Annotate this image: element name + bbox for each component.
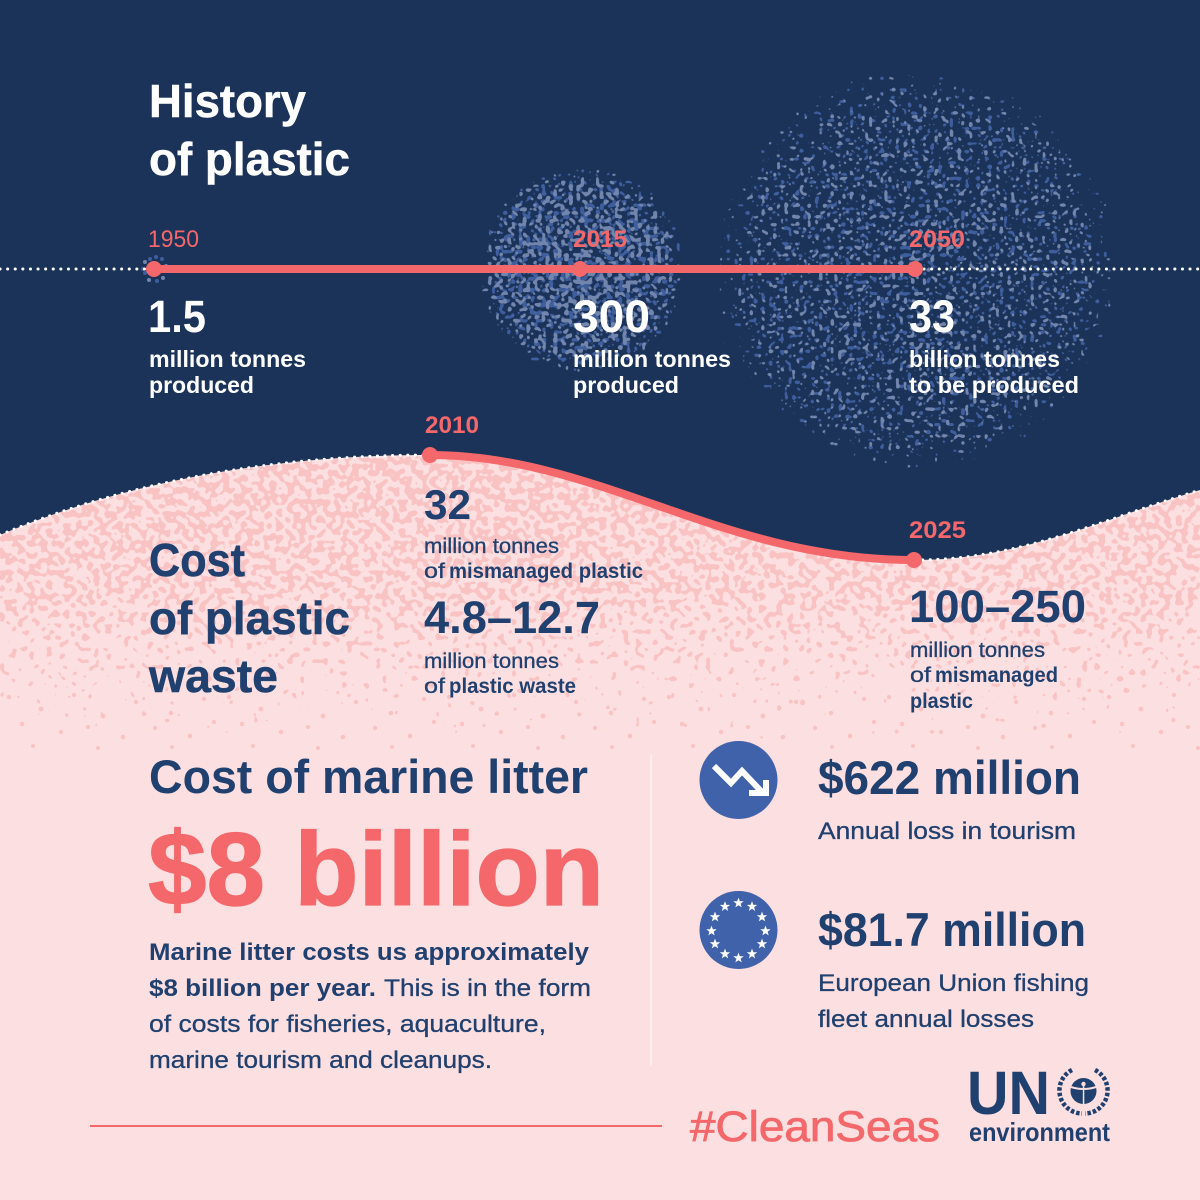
stat: 32 million tonnes mismanaged: million tonnes xyxy=(424,535,559,558)
dotted timeline extensions xyxy=(0,268,1200,270)
sparse dots at bottom of texture xyxy=(0,690,1200,752)
stat: 100–250 million tonnes: plastic xyxy=(910,690,973,713)
year 2010: 2010 xyxy=(425,412,479,439)
body text: marine litter: This is in the form xyxy=(384,975,591,1002)
dotted edge of wave xyxy=(0,455,1200,560)
stat: 300 million tonnes: 300 xyxy=(573,291,650,342)
stat: 300 million tonnes: million tonnes xyxy=(573,346,731,372)
body text: marine litter: of costs for fisheries, aquaculture, xyxy=(149,1011,546,1038)
stat: 4.8–12.7 million tonnes waste: of xyxy=(424,675,445,698)
body text: marine litter: $8 billion per year. xyxy=(149,975,376,1002)
pink wave panel xyxy=(0,455,1200,1200)
speckled dot texture xyxy=(0,455,1200,738)
heading: cost of marine litter: Cost of marine litter xyxy=(149,750,588,803)
stat: 33 billion tonnes: 33 xyxy=(909,291,955,342)
heading: history of plastic: History xyxy=(149,75,306,127)
stat: 300 million tonnes xyxy=(573,291,731,398)
stat: 33 billion tonnes: billion tonnes xyxy=(909,346,1060,372)
heading: history of plastic xyxy=(149,75,350,185)
stat: $622 million: $622 million xyxy=(818,751,1081,804)
dot cloud: 1950 xyxy=(141,255,168,283)
icon: EU stars xyxy=(700,891,778,969)
heading: cost of plastic waste: Cost xyxy=(149,534,245,586)
stat: 1.5 million tonnes: 1.5 xyxy=(148,291,206,342)
stat: 1.5 million tonnes: produced xyxy=(149,372,254,398)
stat: 100–250 million tonnes: of xyxy=(910,664,931,687)
body text: marine litter xyxy=(149,939,591,1074)
curve: mismanaged plastic trend xyxy=(422,447,922,568)
stat: 1.5 million tonnes xyxy=(148,291,306,398)
footer rule xyxy=(90,1125,662,1127)
stat: $81.7 million: $81.7 million xyxy=(818,903,1086,956)
big number: $8 billion: $8 billion xyxy=(148,812,604,928)
heading: history of plastic: of plastic xyxy=(149,133,350,185)
stat: 4.8–12.7 million tonnes waste xyxy=(424,592,600,698)
stat: 32 million tonnes mismanaged: mismanaged plastic xyxy=(449,560,643,583)
logo: UN environment xyxy=(967,1059,1110,1147)
stat: 100–250 million tonnes: 100–250 xyxy=(909,581,1086,632)
stat: 100–250 million tonnes: million tonnes xyxy=(910,639,1045,662)
stat: 100–250 million tonnes: mismanaged xyxy=(935,664,1058,687)
year 2015: 2015 xyxy=(573,226,627,253)
stat: $81.7 million: fleet annual losses xyxy=(818,1006,1034,1033)
stat: 32 million tonnes mismanaged xyxy=(424,481,643,583)
divider xyxy=(650,755,652,1066)
stat: 100–250 million tonnes xyxy=(909,581,1086,713)
stat: 4.8–12.7 million tonnes waste: million tonnes xyxy=(424,650,559,673)
stat: 33 billion tonnes: to be produced xyxy=(909,372,1079,398)
dot cloud: 2015 xyxy=(476,164,688,376)
stat: 300 million tonnes: produced xyxy=(573,372,679,398)
stat: $81.7 million xyxy=(818,903,1089,1033)
icon: downward trend xyxy=(700,741,778,819)
stat: $622 million: Annual loss in tourism xyxy=(818,818,1076,845)
year 1950: 1950 xyxy=(148,226,199,253)
logo: UN environment: environment xyxy=(969,1117,1110,1147)
year 2025: 2025 xyxy=(909,517,966,544)
stat: 1.5 million tonnes: million tonnes xyxy=(149,346,306,372)
body text: marine litter: Marine litter costs us approximately xyxy=(149,939,589,966)
dot cloud: 2050 xyxy=(708,63,1122,477)
logo: UN environment: UN xyxy=(967,1059,1050,1127)
stat: 32 million tonnes mismanaged: 32 xyxy=(424,481,471,528)
heading: cost of plastic waste: waste xyxy=(148,650,278,702)
stat: 33 billion tonnes xyxy=(909,291,1079,398)
body text: marine litter: marine tourism and cleanups. xyxy=(149,1047,492,1074)
year 2050: 2050 xyxy=(909,226,965,253)
heading: cost of plastic waste: of plastic xyxy=(149,592,350,644)
stat: 32 million tonnes mismanaged: of xyxy=(424,560,445,583)
stat: $622 million xyxy=(818,751,1081,845)
timeline: history of plastic xyxy=(146,261,923,277)
stat: $81.7 million: European Union fishing xyxy=(818,970,1089,997)
stat: 4.8–12.7 million tonnes waste: 4.8–12.7 xyxy=(424,592,600,643)
hashtag: CleanSeas: #CleanSeas xyxy=(690,1103,940,1151)
heading: cost of plastic waste xyxy=(148,534,350,702)
stat: 4.8–12.7 million tonnes waste: plastic waste xyxy=(449,675,576,698)
